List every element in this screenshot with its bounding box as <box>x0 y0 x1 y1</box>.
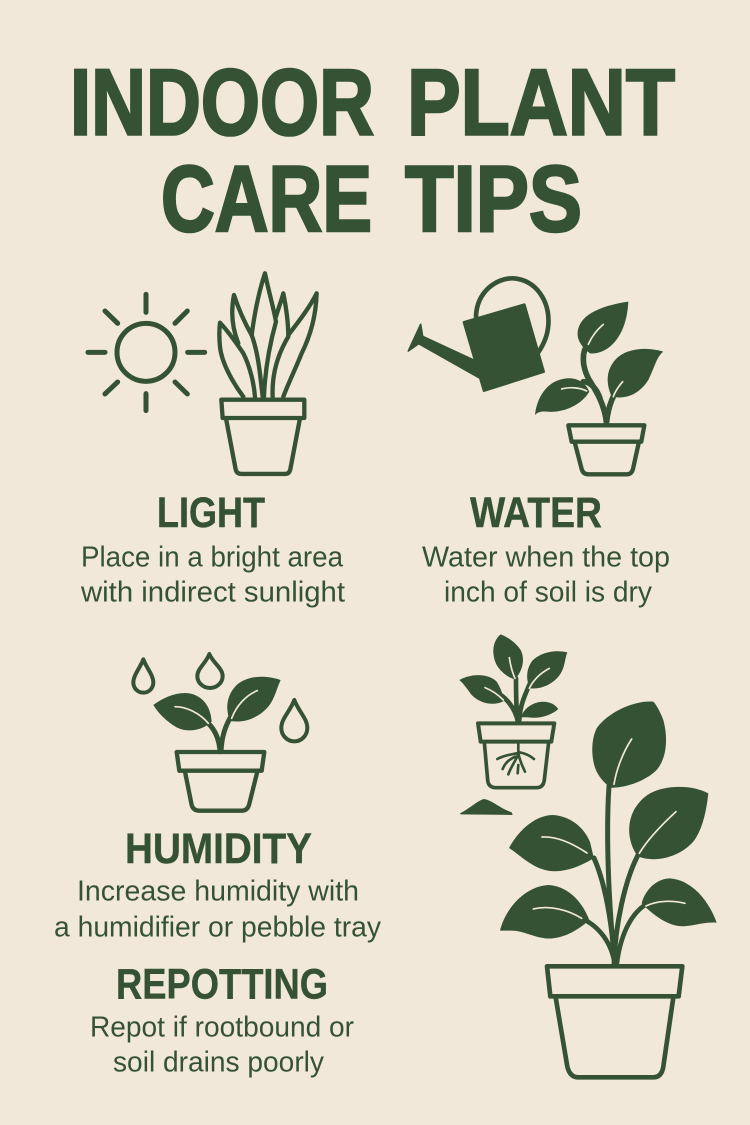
heading: repotting: REPOTTING <box>116 960 328 1008</box>
text: light description: with indirect sunlight <box>80 576 345 608</box>
icon: watering can <box>408 278 548 391</box>
icon: seedling in pot <box>535 302 663 474</box>
heading: water: WATER <box>470 489 602 537</box>
icon: snake plant in pot <box>219 273 317 474</box>
heading: light: LIGHT <box>157 489 265 537</box>
title: TIPS <box>405 146 582 251</box>
title: CARE <box>161 146 372 251</box>
icon: sprout in pot <box>153 677 281 811</box>
text: humidity description <box>54 876 382 944</box>
title: PLANT <box>407 50 675 154</box>
title <box>70 50 675 251</box>
text: light description <box>80 542 345 608</box>
text: repotting description: Repot if rootbound or <box>90 1012 354 1044</box>
panel: repotting <box>90 634 567 1078</box>
text: repotting description: soil drains poorly <box>113 1046 325 1078</box>
text: repotting description <box>90 1012 354 1078</box>
title: INDOOR <box>70 50 374 154</box>
text: water description: inch of soil is dry <box>444 576 653 608</box>
panel: light <box>80 273 345 608</box>
text: water description: Water when the top <box>422 542 670 574</box>
panel: water <box>408 278 670 608</box>
panel: humidity <box>54 654 382 944</box>
icon: water drops <box>133 654 307 741</box>
icon: small plant with roots <box>459 634 567 788</box>
text: water description <box>422 542 670 608</box>
icon: sun <box>88 294 205 411</box>
icon: large potted plant <box>500 702 717 1077</box>
text: light description: Place in a bright area <box>81 542 343 574</box>
text: humidity description: a humidifier or pebble tray <box>54 912 382 944</box>
icon: soil pile <box>460 799 513 815</box>
text: humidity description: Increase humidity with <box>77 876 359 908</box>
heading: humidity: HUMIDITY <box>125 825 312 873</box>
